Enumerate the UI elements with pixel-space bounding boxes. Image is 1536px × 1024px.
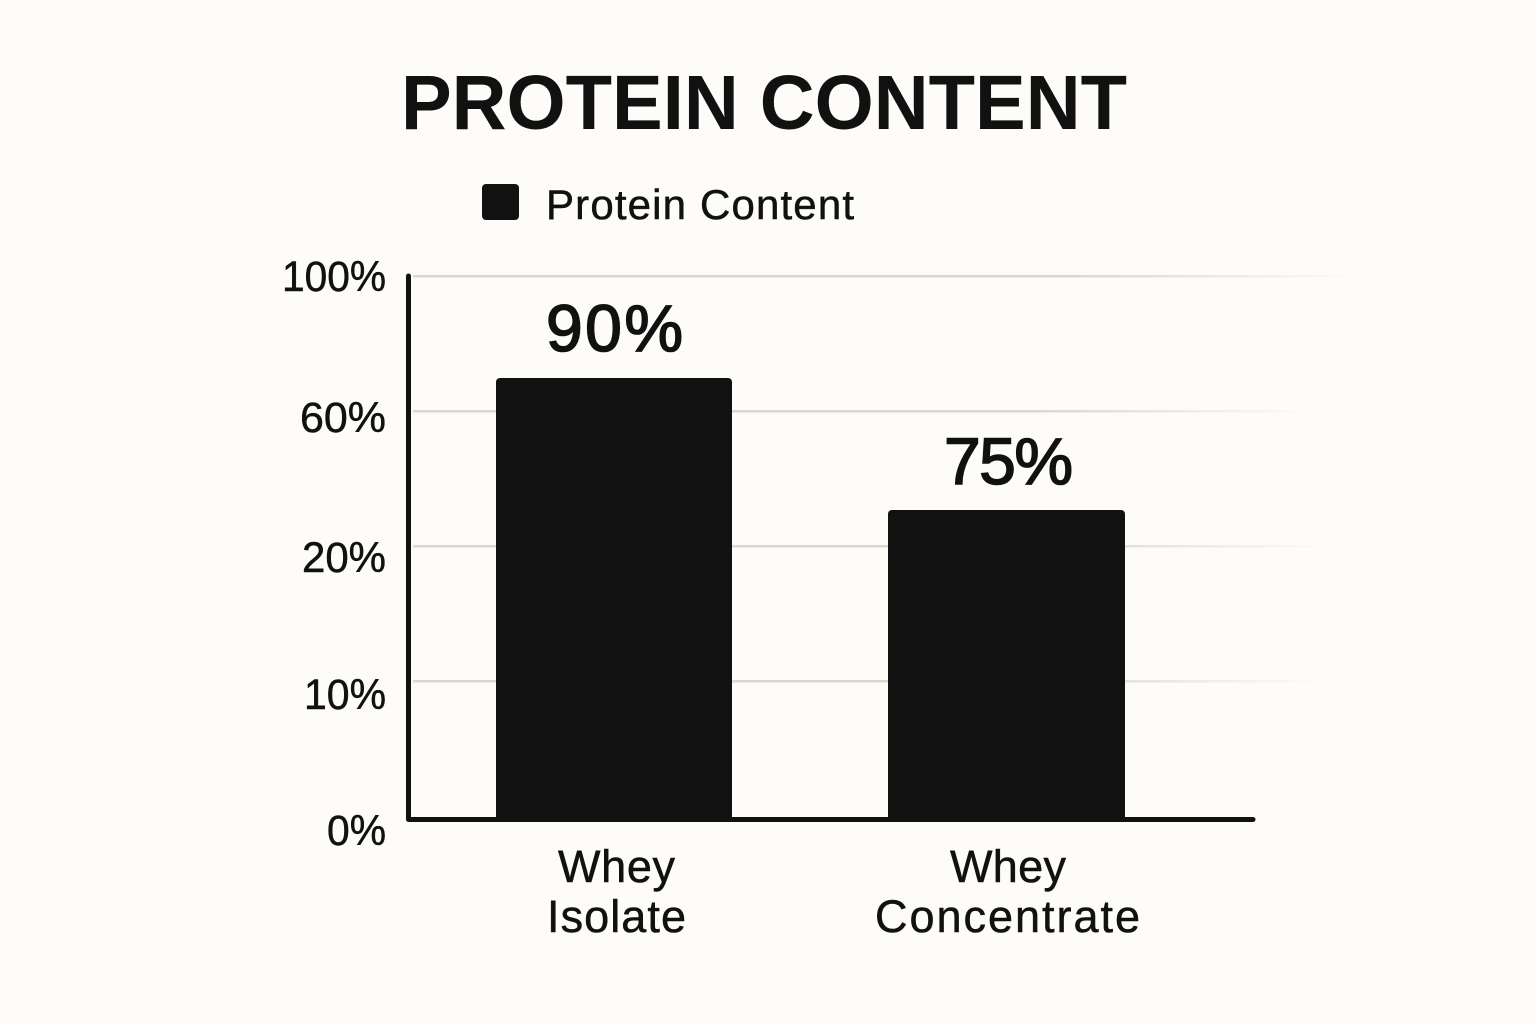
legend [482,181,854,228]
bar: Whey Isolate [496,291,732,942]
title: PROTEIN CONTENT [401,60,1127,146]
axes [408,276,1253,820]
y axis labels [282,253,386,855]
y axis labels: 0% [327,807,386,855]
y axis labels: 20% [302,534,386,582]
value label 75%: 75% [944,424,1073,498]
y axis labels: 10% [304,671,386,719]
category label: Whey [950,841,1066,892]
value label 90%: 90% [546,291,683,365]
legend label: Protein Content [546,181,854,228]
bar: Whey Isolate: Isolate [547,891,686,942]
y axis labels: 60% [300,394,386,442]
legend swatch [482,184,519,220]
y axis labels: 100% [282,253,386,301]
category label: Whey [558,841,676,892]
bar: Whey Concentrate [875,424,1140,942]
bar: Whey Concentrate: Concentrate [875,891,1140,942]
gridlines [413,275,1363,682]
